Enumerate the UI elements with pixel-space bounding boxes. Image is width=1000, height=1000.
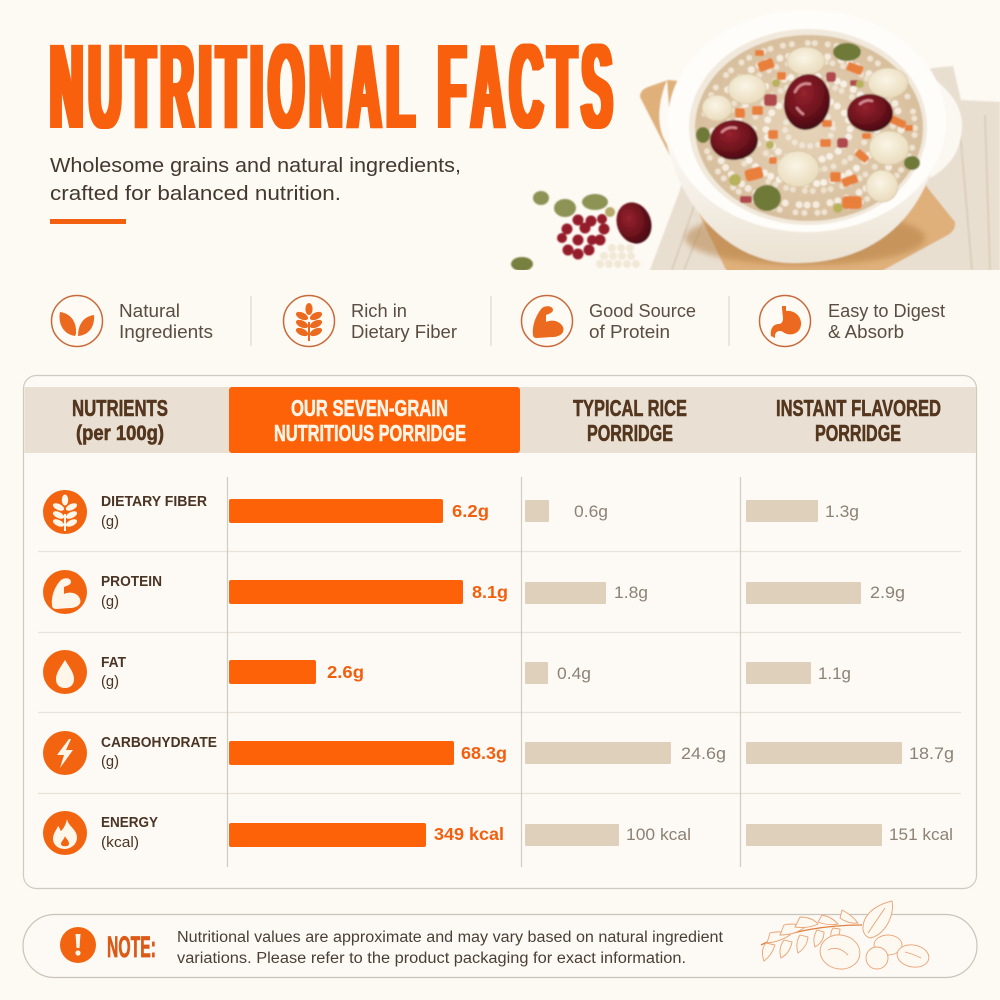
- icon: flame: [43, 811, 87, 855]
- header: instant flavored porridge: INSTANT FLAVORED: [776, 395, 941, 421]
- row: protein: PROTEIN: [101, 574, 162, 590]
- header: nutrients: [72, 395, 168, 445]
- row: carbohydrate: 24.6g: [681, 745, 726, 763]
- title accent bar: [50, 219, 126, 224]
- linen cloth: [648, 66, 1000, 275]
- bowl body: [666, 144, 930, 264]
- feature: natural ingredients: Ingredients: [119, 321, 213, 342]
- row: protein: (g): [101, 593, 119, 610]
- row: energy: [43, 811, 953, 855]
- row: dietary fiber: [43, 490, 859, 534]
- lotus seeds: [702, 47, 909, 202]
- feature: protein: [522, 296, 696, 346]
- row: protein: 8.1g: [472, 582, 508, 602]
- red dates: [710, 70, 893, 160]
- wooden board: [640, 80, 955, 272]
- mung beans: [696, 43, 920, 211]
- row: fat: (g): [101, 673, 119, 690]
- note text: Nutritional values are approximate and may vary based on natural ingredient: [177, 929, 724, 946]
- subtitle: [50, 154, 461, 205]
- header: our porridge: OUR SEVEN-GRAIN: [291, 395, 448, 421]
- feature: digestion: & Absorb: [828, 321, 904, 342]
- subtitle: Wholesome grains and natural ingredients,: [50, 154, 461, 177]
- row: dietary fiber: 0.6g: [574, 503, 608, 521]
- note text: variations. Please refer to the product packaging for exact information.: [177, 950, 686, 967]
- row: protein: 1.8g: [614, 584, 648, 602]
- hero photo: porridge bowl: [511, 10, 1000, 275]
- row: fat: 2.6g: [327, 662, 364, 682]
- note label: NOTE:: [107, 931, 156, 964]
- header: instant flavored porridge: PORRIDGE: [815, 420, 901, 446]
- loose beans and grains: [511, 191, 657, 271]
- feature: dietary fiber: Rich in: [351, 300, 407, 321]
- note text: [177, 929, 724, 967]
- header: nutrients: NUTRIENTS: [72, 395, 168, 421]
- row: energy: 151 kcal: [889, 826, 953, 844]
- panel: note: [23, 901, 977, 978]
- bowl handles: [930, 78, 962, 178]
- highlighted column header: [229, 387, 520, 453]
- row: carbohydrate: CARBOHYDRATE: [101, 735, 217, 751]
- row: energy: (kcal): [101, 834, 139, 851]
- row: energy: ENERGY: [101, 815, 158, 831]
- icon: exclamation: [60, 927, 96, 963]
- row: dietary fiber: 6.2g: [452, 501, 489, 521]
- row: energy: 100 kcal: [626, 826, 691, 844]
- row: carbohydrate: (g): [101, 753, 119, 770]
- barley grains: [703, 43, 915, 213]
- bowl shadow: [682, 220, 926, 266]
- row: energy: 349 kcal: [434, 824, 504, 844]
- carrot and red bean pieces: [735, 50, 913, 209]
- table frame: [24, 376, 976, 888]
- feature strip: [52, 296, 945, 346]
- row: carbohydrate: [43, 731, 954, 775]
- row: dietary fiber: (g): [101, 513, 119, 530]
- panel: nutrition comparison table: [24, 376, 976, 888]
- feature: natural ingredients: Natural: [119, 300, 180, 321]
- feature: digestion: Easy to Digest: [828, 300, 945, 321]
- title: NUTRITIONAL FACTS: [50, 20, 618, 154]
- subtitle: crafted for balanced nutrition.: [50, 182, 341, 205]
- feature: digestion: [760, 296, 945, 346]
- row: dietary fiber: 1.3g: [825, 503, 859, 521]
- row: carbohydrate: 18.7g: [909, 745, 954, 763]
- icon: droplet: [43, 650, 87, 694]
- icon: wheat: [43, 490, 87, 534]
- row: dietary fiber: DIETARY FIBER: [101, 494, 208, 510]
- icon: lightning bolt: [43, 731, 87, 775]
- feature: protein: Good Source: [589, 300, 696, 321]
- feature: natural ingredients: [52, 296, 213, 346]
- bowl rim: [668, 68, 936, 232]
- header: our porridge: NUTRITIOUS PORRIDGE: [274, 420, 466, 446]
- row: carbohydrate: 68.3g: [461, 743, 507, 763]
- header: typical rice porridge: TYPICAL RICE: [573, 395, 687, 421]
- table header band: [24, 387, 976, 453]
- row: fat: FAT: [101, 655, 126, 671]
- icon: muscle: [43, 570, 87, 614]
- illustration: grain sketch: [761, 901, 931, 972]
- porridge: [695, 35, 923, 221]
- note frame: [23, 914, 977, 978]
- header: instant flavored porridge: [776, 395, 941, 446]
- header: nutrients: (per 100g): [76, 422, 164, 445]
- feature: dietary fiber: Dietary Fiber: [351, 321, 457, 342]
- row: protein: [43, 570, 905, 614]
- feature: dietary fiber: [284, 296, 457, 346]
- header: typical rice porridge: [573, 395, 687, 446]
- row: fat: [43, 650, 851, 694]
- row: fat: 0.4g: [557, 665, 591, 683]
- header: typical rice porridge: PORRIDGE: [587, 420, 673, 446]
- feature: protein: of Protein: [589, 321, 670, 342]
- row: protein: 2.9g: [870, 584, 905, 602]
- header: our porridge: [274, 395, 466, 446]
- row: fat: 1.1g: [818, 665, 851, 683]
